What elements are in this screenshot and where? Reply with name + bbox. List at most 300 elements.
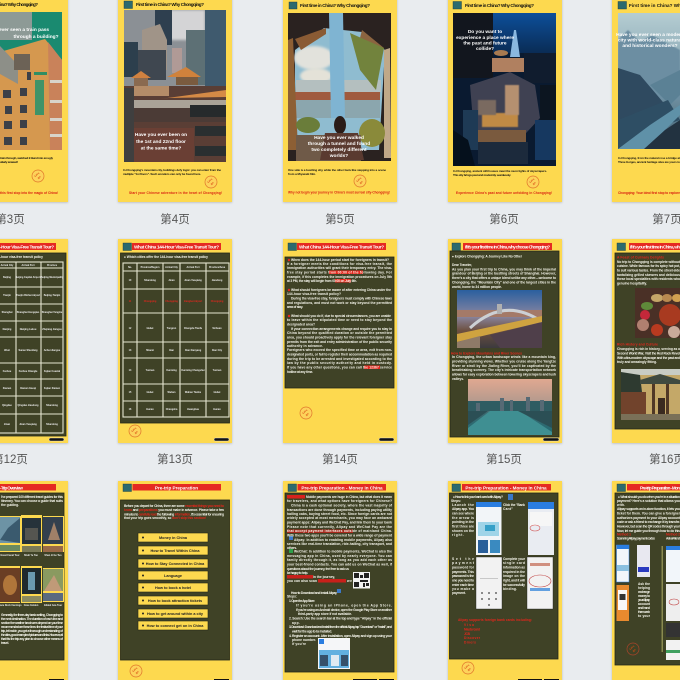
header — [453, 2, 534, 9]
panel: steps — [450, 493, 558, 659]
photo: temple courtyard — [621, 369, 680, 420]
panel: visa table — [0, 253, 66, 436]
panel: visa table: Arrival Port — [21, 264, 35, 267]
screenshot 3 — [476, 557, 502, 609]
caption: In Chongqing, from the natural rose a bridge at — [618, 156, 680, 160]
panel: payment steps: ● What should you do when you're in a situation — [618, 495, 680, 499]
panel: visa table: 14 — [129, 369, 132, 372]
step text: your Alipay — [638, 598, 650, 602]
panel: article: Dear Traveler, — [452, 263, 472, 267]
step text: exchange — [638, 590, 650, 594]
step text: payment — [452, 561, 475, 565]
paragraph: section the weather brochures depend on your time — [1, 621, 63, 625]
stamp — [527, 176, 539, 188]
intro text: Before you depart for China, there are some essential things you need to — [124, 504, 224, 508]
panel: visa table: Chongqing — [144, 300, 157, 303]
stamp: go — [632, 648, 637, 653]
panel: payment steps: authorizes payment to your Alipay account — [617, 516, 680, 520]
step text: Set the — [452, 557, 474, 561]
card captions row 2: Gilded Ana Tour — [44, 604, 62, 607]
panel: visa table: Hubei — [147, 391, 154, 394]
panel: visa table: Jiaodong — [212, 279, 223, 282]
panel: visa table: Beijing-Tianjin — [44, 294, 61, 297]
panel: visa table: Xian Xianyang — [185, 349, 202, 352]
overlay question: two completely different — [311, 147, 367, 153]
page 3 slide — [0, 0, 68, 202]
header: Pre-trip Preparation — [155, 486, 198, 490]
step text: be successfully — [503, 583, 525, 587]
step text: required in the — [503, 570, 525, 574]
header: First time in China? Why Chongqing? — [300, 3, 370, 8]
page pill — [49, 679, 64, 680]
panel: article: world, home to 34 million people. — [451, 285, 502, 289]
panel: visa table: Wuxi — [4, 349, 10, 352]
step headings: Ask a Friend — [666, 536, 680, 540]
label page 4: 第4页 — [160, 212, 190, 226]
panel: visa table: Xian — [169, 349, 175, 352]
stamp: go — [135, 670, 140, 675]
panel: visa table: Kunming — [166, 369, 177, 372]
panel: money text: Please note that currently, Alipay and WeChat Pay are the — [287, 525, 392, 529]
overlay question — [135, 132, 187, 152]
step text: single card — [503, 561, 525, 565]
menu buttons: How to Stay Connected in China — [146, 562, 205, 566]
divider bar — [662, 546, 663, 652]
panel: article: providing stunning views. Whether you cruise along the Yangtze — [452, 360, 556, 364]
overlay question: through a building? — [13, 34, 59, 40]
header — [452, 243, 552, 250]
header — [123, 243, 221, 250]
panel: payment steps: payment? Here's a solution that allows you — [617, 499, 680, 503]
page 7 slide — [612, 0, 680, 202]
screenshot 2 — [528, 502, 554, 555]
panel: money text: Mobile payments are huge in China, but what does it mean — [306, 495, 392, 499]
caption: One side is a bustling city, while the other feels like stepping into a scene — [288, 168, 386, 172]
overlay question: the 1st and 22nd floor — [136, 139, 186, 145]
step text: to your — [638, 614, 651, 618]
stamp: Let's — [463, 663, 471, 670]
panel: FAQ text: China beyond the qualified duration or outside the permitted — [287, 331, 392, 335]
page pill — [379, 438, 394, 441]
panel: visa table: Nanjing Lukou — [20, 328, 37, 331]
screenshot 4 — [527, 557, 553, 609]
panel: article: Rich History and Culture — [617, 342, 658, 346]
caption — [288, 168, 386, 176]
step text: enter each time — [452, 583, 474, 587]
install steps — [287, 589, 393, 646]
panel: FAQ text: free stay period starts from 00:00 of the following day. For — [287, 270, 393, 274]
install steps: 4. Register an account: After installation, open Alipay and sign up using your — [289, 634, 393, 638]
header — [288, 243, 386, 250]
install steps: if you're — [292, 642, 306, 646]
red list — [458, 618, 532, 644]
page: alipay card binding slide — [448, 481, 562, 680]
paragraph — [1, 613, 64, 645]
panel: article: tantalizing grilled skewers and delicious — [617, 273, 680, 277]
panel: money text: hailing cabs, buying street food, etc. Since foreign cards are not — [287, 512, 393, 516]
stamp: go — [359, 180, 364, 185]
panel: article: genuine hospitality. — [617, 282, 647, 286]
panel: payment steps: code or ask a friend to exchange it by transfer. — [617, 520, 680, 524]
panel: visa table: Chongqing — [165, 300, 178, 303]
label page 15: 第15页 — [486, 452, 522, 466]
caption: train through, watched it blend into an ugly — [0, 156, 53, 160]
page: alipay payment slide — [612, 481, 680, 680]
screenshots right — [666, 546, 680, 660]
title bar — [0, 243, 56, 250]
panel: article: As you plan your first trip to China, you may think of the imperial — [452, 268, 556, 272]
caption: Three Gorges, ancient heritage sites are yours to — [618, 160, 680, 164]
page 6 slide — [448, 0, 562, 202]
panel: article: With ultra-modern cityscape and the past and — [617, 356, 680, 360]
step text — [638, 582, 651, 618]
step text: right, and it will — [503, 578, 525, 582]
panel: steps: Steps: — [451, 499, 461, 503]
panel: visa table: Fuzhou — [3, 370, 12, 373]
panel: article: A Feast of Culinary Delights — [617, 256, 664, 260]
stamp — [300, 407, 312, 419]
card captions row 1: Shuli Ye Tao — [24, 554, 39, 557]
panel: payment steps: with. — [616, 503, 625, 507]
panel: visa table: 15 — [129, 391, 132, 394]
photo: train through building — [0, 12, 62, 150]
panel: visa table: Wuhan Tianhe — [185, 391, 202, 394]
panel: visa table: Arrival City — [1, 264, 14, 267]
red list: Mastercard — [464, 628, 480, 632]
panel: visa table: Hubei — [214, 391, 221, 394]
page pill — [353, 679, 377, 680]
caption — [0, 156, 53, 164]
menu buttons: How to Travel Within China — [151, 549, 200, 553]
panel: money text: family directly through it, as long as you add each other as — [287, 558, 392, 562]
screenshot 1 — [476, 502, 502, 555]
header — [289, 2, 370, 9]
panel: visa table: Arrival City — [165, 266, 179, 269]
overlay question — [456, 29, 514, 52]
step text: Alipay app. You — [452, 507, 474, 511]
header: Pre-trip Preparation - Money in China — [465, 486, 547, 490]
paragraph: recommended are these lines: the festival time of your — [1, 625, 64, 629]
panel: visa table: Xiamen Gaoqi — [20, 387, 36, 390]
panel: visa table: Shandong — [46, 404, 58, 407]
step text: Complete your — [503, 557, 526, 561]
step text: Launch the — [452, 503, 474, 507]
photo: city skyline and river — [468, 379, 552, 435]
panel: money text: that accept payment interfaces outside of mainland China. — [287, 529, 392, 533]
stamp: go — [210, 181, 215, 186]
panel: FAQ text: If your connection arrangements change and require you to stay in — [291, 327, 392, 331]
stamp: Let's — [355, 176, 363, 183]
step text: shown on the — [452, 529, 474, 533]
panel: money text — [285, 493, 394, 672]
panel: FAQ text: hotline at any time. — [287, 370, 313, 374]
red list: Alipay supports foreign bank cards including: — [458, 618, 532, 622]
panel: money text: services like real-time translation, ride-hailing, city transport, and — [287, 542, 392, 546]
page pill — [214, 438, 229, 441]
paragraph: the cities, good example of pictures and links. However, all — [1, 633, 63, 637]
panel: FAQ text: area of stay. — [287, 305, 303, 309]
step text — [452, 503, 526, 595]
photo: hot pot dishes — [635, 288, 680, 338]
step text: them cash — [638, 610, 650, 614]
panel: FAQ text: designated area? — [287, 322, 315, 326]
paragraph: the next destination. The duration of each line and — [1, 617, 63, 621]
page: money in China slide — [283, 481, 397, 680]
panel: visa table: Hubei — [147, 327, 154, 330]
photo: high-rises and pagoda — [124, 10, 226, 162]
caption: In Chongqing, ancient stilt houses meet the neon lights of skyscrapers. — [453, 169, 547, 173]
panel: visa table: Shandong — [144, 279, 156, 282]
photo: view through arch — [288, 13, 391, 161]
stamp — [130, 665, 142, 677]
panel: visa table: Nanjing — [3, 328, 12, 331]
panel: overview: I've prepared 100 different travel guides for this — [1, 495, 63, 499]
stamp — [32, 170, 44, 182]
header: First time in China? Why Chongqing? — [465, 3, 534, 8]
panel: money text: messaging app in China, used by nearly everyone. You can — [287, 554, 392, 558]
stamp: go — [467, 667, 472, 672]
red list: Discover — [464, 636, 481, 640]
stamp — [462, 662, 474, 674]
panel: visa table: Zhejiang Jiangsu — [42, 328, 62, 331]
panel: FAQ text: Foreigners who exceed the specified time or area, exit from non- — [287, 348, 392, 352]
panel: visa table: Beijing Capital Airport — [15, 276, 41, 279]
page pill 2 — [544, 679, 559, 680]
caption: multiple "1st floors". Such wonders can only be found here. — [123, 172, 201, 176]
guide cards row 2 — [0, 566, 64, 603]
panel: article: Chongqing, the "Mountain City" and one of the largest cities in the — [452, 280, 556, 284]
page 16 slide — [612, 239, 680, 443]
red highlights — [288, 259, 380, 369]
header — [123, 484, 221, 492]
caption — [123, 168, 221, 176]
stamp: go — [305, 412, 310, 417]
header: If it's your first time in China, why choose Chongqing? — [465, 244, 550, 250]
panel: money text: for travelers, and what options have foreigners for Chinese? — [287, 499, 392, 503]
panel: money text: questions about the journey, feel free to ask us — [287, 567, 349, 571]
step text: money to — [638, 594, 650, 598]
panel: article: ● Explore Chongqing: A Journey Like No Other — [452, 254, 523, 258]
panel: visa table: Jiangbei Airport — [184, 300, 202, 303]
overlay question: Have you ever walked — [314, 135, 364, 141]
panel: visa table: Sunan Shuofang — [18, 349, 38, 352]
panel: money text: be happy to help. — [287, 571, 308, 575]
stamp: Let's — [528, 177, 536, 184]
panel: article: grandeur of Beijing or the bustling streets of Shanghai. However, — [452, 272, 556, 276]
panel: visa table: Jinan — [168, 279, 175, 282]
panel: visa table: Shanghai — [2, 311, 13, 314]
caption — [618, 156, 680, 164]
panel: FAQ text: and regulations, and must not work or stay beyond the permitted — [287, 301, 392, 305]
panel: payment steps: ticket for them. You can give a foreigner — [617, 512, 680, 516]
screenshots left — [616, 545, 650, 621]
panel: visa table: 16 — [129, 408, 132, 411]
install steps: If you're using an iPhone, open the App Store. — [296, 604, 392, 608]
panel: visa table: Province — [47, 264, 58, 267]
step text: Click the "Bank — [503, 503, 525, 507]
panel: visa table: Anhui Jiangsu — [44, 349, 61, 352]
step text: pointing in the — [452, 520, 474, 524]
panel: visa table: Tongren — [167, 327, 177, 330]
caption: In Chongqing's mountain city, buildings defy logic: you can enter from the — [123, 168, 221, 172]
panel: visa table: Hunan — [213, 408, 221, 411]
panel: visa table: Jinan — [4, 423, 11, 426]
panel: visa table: Huanghua — [187, 408, 200, 411]
install steps: Steps: — [287, 594, 297, 598]
header — [618, 2, 680, 9]
overlay question: and historical wonders? — [622, 43, 678, 49]
stamp — [129, 425, 141, 437]
panel: FAQ text: When does the 144-hour period start for foreigners in transit? — [291, 258, 389, 262]
overlay question: ever seen a train pass — [0, 27, 49, 33]
panel: visa table: Beijing — [3, 276, 12, 279]
panel: visa table — [120, 253, 230, 423]
step text: image on the — [503, 574, 525, 578]
step headings: Method 1 — [617, 532, 631, 536]
panel: money text: China is a cash optional society, where the vast majority of — [291, 504, 393, 508]
step headings: Scanning Alipay payment codes — [617, 536, 655, 540]
panel: FAQ text: permits from the exit and entry administration of the public security — [287, 340, 392, 344]
step text: the arrow is — [452, 516, 474, 520]
panel: overview: the guiding. — [1, 503, 19, 507]
panel: payment steps: However, but scan the QR codes through your — [617, 524, 680, 528]
header: Pre-trip Preparation - Money in China — [301, 486, 383, 490]
photo: misty gorge — [618, 13, 680, 149]
panel: FAQ text: What should you do if, due to special circumstances, you are unable — [291, 314, 391, 318]
panel: money text: you can also scan — [287, 579, 317, 583]
step text: account — [638, 602, 651, 606]
panel: money text: Alipay: In addition to enabling mobile payments, Alipay also — [294, 538, 392, 542]
panel: article: breathtaking scenery. The city's intricate transportation network — [452, 368, 556, 372]
menu buttons: How to book attraction tickets — [148, 599, 202, 603]
step text: Card" — [503, 507, 513, 511]
overlay question: at the same time? — [141, 146, 181, 152]
panel: FAQ text: designated ports, or fail to register their accommodation as required — [287, 352, 392, 356]
panel: money text: widely accepted at most merchants, you may face an awkward — [286, 516, 392, 520]
stamp — [354, 175, 366, 187]
panel: article: Chongqing is rich in history, serving as a — [617, 347, 680, 351]
overlay question: worlds? — [329, 153, 348, 159]
title bar: -Trip Overview — [0, 486, 23, 490]
red call to action: Why not begin your journey in China's most surreal city-Chongqing! — [288, 190, 390, 194]
page pill — [49, 438, 64, 441]
red call to action: Experience China's past and future unfolding in Chongqing! — [456, 191, 552, 195]
panel: visa table: Chongqing — [211, 300, 224, 303]
page pill 2 — [379, 679, 394, 680]
caption — [453, 169, 547, 177]
panel: visa table: Qingdao — [2, 404, 12, 407]
menu buttons — [138, 533, 208, 630]
panel: visa table: Xiamen — [3, 387, 12, 390]
menu buttons: Money in China — [159, 536, 188, 540]
step text: can see where — [452, 512, 474, 516]
panel: article: How to Explore Mountains and River Scenes — [451, 352, 522, 356]
caption: utterly amazed! — [0, 160, 18, 164]
panel: visa table: -hour visa-free transit policy — [0, 255, 43, 259]
panel: visa table: Shandong — [46, 423, 58, 426]
panel: menu — [120, 500, 230, 660]
panel: article: these local specialties with residents who — [617, 277, 680, 281]
panel: visa table: Shanghai Yangtze — [42, 311, 63, 314]
panel: visa table: Fujian Xiamen — [44, 387, 61, 390]
panel: FAQ text — [285, 257, 394, 388]
panel: visa table: Changsha — [166, 408, 178, 411]
card captions row 1: Great Canal Tour — [0, 554, 20, 557]
step text: and hand — [638, 606, 650, 610]
panel: visa table: Hunan — [146, 408, 154, 411]
intro text — [124, 504, 224, 520]
stamp: go — [37, 175, 42, 180]
red list: JCB — [464, 632, 471, 636]
step text: you make a — [452, 587, 474, 591]
panel: visa table: Jinan Yaoqiang — [184, 279, 202, 282]
intro text: minutes to carefully read the following information. It's essential for ensuring — [124, 512, 224, 516]
header — [124, 1, 204, 8]
card captions row 2 — [0, 604, 62, 607]
stamp: Let's — [33, 171, 41, 178]
page pill — [214, 679, 229, 680]
page: trip overview slide — [0, 481, 68, 680]
panel: FAQ text: immigration authorities will grant their temporary entry. The visa- — [287, 266, 392, 270]
panel: visa table: Beijing Municipality — [41, 276, 64, 279]
panel: overview — [0, 493, 64, 660]
panel: visa table: Wuhan — [168, 391, 176, 394]
panel: money text: transactions are done through payments, including paying utility — [287, 508, 392, 512]
menu buttons: How to get around within a city — [147, 612, 204, 616]
panel: visa table: Yunnan — [146, 369, 155, 372]
step text: helping — [638, 586, 650, 590]
panel: visa table: Province/Area — [209, 266, 226, 269]
overlay question: Have you ever been on — [135, 132, 187, 138]
panel: visa table: Xian City — [212, 349, 223, 352]
overlay question: through a tunnel and found — [308, 141, 370, 147]
stamp: Let's — [301, 408, 309, 415]
panel: money text: your best-friend contacts. You can add us on WeChat as well, if — [287, 562, 393, 566]
overlay question: experience a place where — [456, 35, 514, 41]
panel: visa table: Chengdu Tianfu — [184, 327, 203, 330]
panel: article: truly and amazingly fitting. — [617, 360, 657, 364]
panel: FAQ text: to leave within the stipulated time or need to stay beyond the — [287, 318, 392, 322]
panel: FAQ text: If you have any other questions, you can call the 12367 service — [287, 366, 392, 370]
paragraph: that fits the trip any plan to choose other means of — [1, 637, 64, 641]
step text: payment. — [452, 591, 466, 595]
intro text: that your trip goes smoothly, so don't skip this section! — [124, 516, 206, 520]
step text: first three are — [452, 524, 474, 528]
page 15 slide — [448, 239, 562, 443]
red call to action: Start your Chinese adventure in the heart of Chongqing! — [129, 191, 222, 195]
overlay question — [0, 27, 59, 40]
guide cards row 1 — [0, 515, 64, 552]
panel: visa table: Fuzhou Changle — [19, 370, 38, 373]
stamp: go — [532, 181, 537, 186]
panel: FAQ text: during the trip to be arrested and investigated according to the — [287, 357, 392, 361]
panel: article — [615, 253, 680, 429]
install steps: 3. Download: Download and install from the official Alipay, tap "Download" or "Install", and — [289, 625, 392, 629]
panel: visa table: No. — [128, 266, 132, 269]
paragraph: trip, let inside, you get a thorough understanding of — [1, 629, 64, 633]
paragraph: travel. — [1, 641, 9, 645]
header: If it's your first time in China, wh — [630, 244, 680, 250]
QR code — [353, 572, 370, 588]
page pill — [543, 438, 559, 441]
step text: password is the — [452, 574, 474, 578]
panel: visa table: Shanxi — [146, 349, 154, 352]
panel: FAQ text: What should foreigners be aware of after entering China under the — [291, 288, 391, 292]
app screenshot — [318, 638, 350, 669]
overlay question: collide? — [476, 46, 494, 52]
install steps: app. — [292, 621, 300, 625]
title bar — [0, 484, 56, 490]
